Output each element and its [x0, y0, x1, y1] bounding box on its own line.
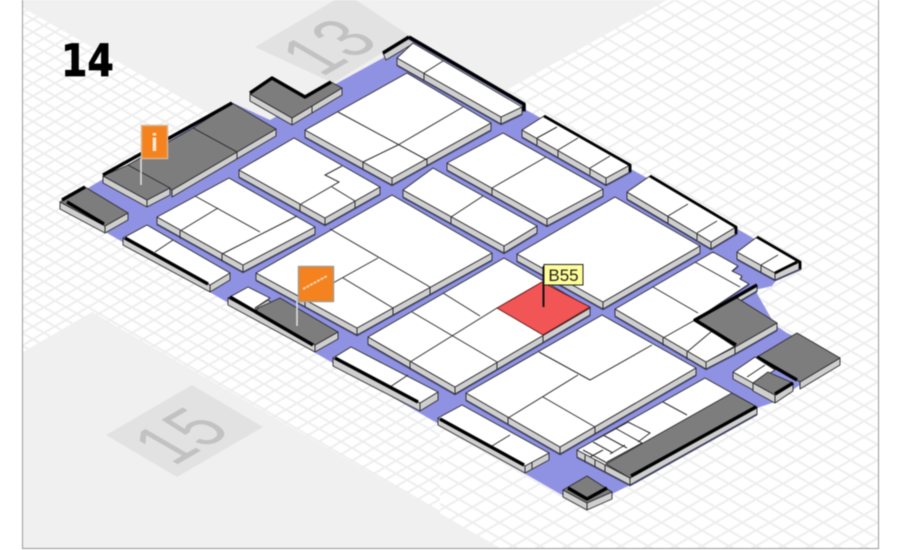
stand block H [123, 225, 230, 292]
stand block Q with highlighted stand [368, 258, 590, 394]
neighbouring hall 13 area [23, 0, 667, 165]
info flag [141, 126, 168, 185]
stand block P [403, 168, 537, 253]
stand block X [228, 287, 338, 352]
stand block T with service strip [577, 378, 757, 485]
stand block Y [333, 347, 438, 411]
stand block V small white [733, 357, 775, 390]
label pole [542, 266, 544, 307]
hall number: 14 [61, 34, 114, 87]
label text: B55 [548, 266, 579, 285]
neighbouring hall 15 area [23, 312, 500, 548]
stand block V dark [757, 333, 840, 389]
stand block V small dark [753, 372, 793, 403]
hall 13 marker: 13 [260, 7, 396, 86]
stand block C dark [250, 78, 342, 125]
background grid left [23, 0, 440, 548]
hall 15 marker: 15 [112, 396, 248, 475]
info letter: i [151, 129, 158, 157]
service flag [297, 266, 334, 326]
stand B55 highlighted [497, 282, 590, 335]
stand block Z [438, 405, 549, 473]
stand block I [256, 195, 492, 335]
stand label B55 [544, 264, 583, 307]
floor plan [60, 37, 840, 510]
flag panel [298, 266, 334, 302]
stand block K [522, 116, 630, 185]
stand block S [466, 315, 696, 454]
stand block J [447, 133, 603, 226]
stand block D small [383, 37, 416, 60]
stand block F [239, 138, 380, 225]
stand block U dark [563, 476, 612, 510]
flag pole [140, 158, 142, 185]
stand block M [737, 237, 800, 280]
label box [544, 264, 583, 285]
stand block A dark [60, 187, 128, 233]
aisles [60, 48, 840, 505]
stand block L [627, 176, 736, 249]
flag panel [142, 126, 168, 158]
flag icon [303, 276, 327, 289]
stand block W [615, 252, 777, 369]
stand block G [157, 178, 315, 272]
stand block N [517, 197, 700, 309]
stand block E [305, 73, 491, 185]
background grid right [440, 0, 878, 548]
stand block B dark row [103, 103, 276, 207]
stand block D long [397, 37, 524, 124]
flag pole [296, 301, 298, 326]
